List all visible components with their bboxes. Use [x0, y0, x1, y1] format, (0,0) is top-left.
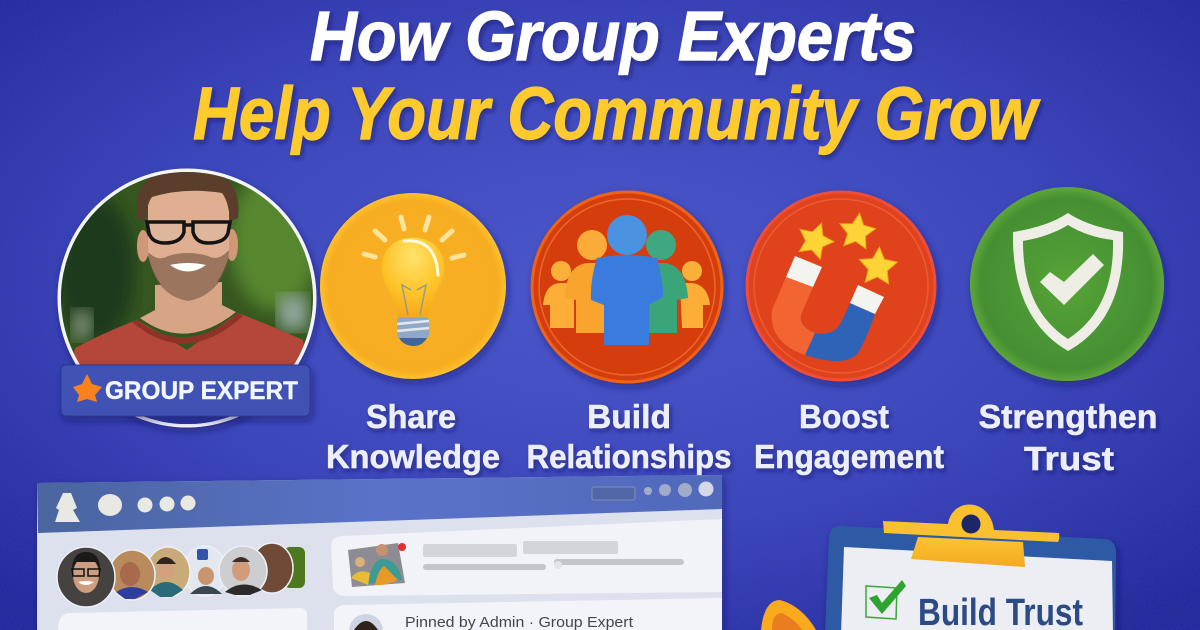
clipboard: build trust [825, 504, 1116, 630]
avatar 6 [251, 543, 293, 593]
glasses [147, 222, 230, 243]
label: boost engagement: Boost [799, 398, 889, 435]
photo [61, 172, 313, 424]
label: share knowledge [326, 398, 500, 475]
ears [137, 230, 149, 262]
header bar [37, 475, 722, 533]
portrait: group expert [50, 165, 320, 440]
post thumbnail [348, 543, 406, 587]
label: share knowledge: Share [366, 398, 456, 435]
avatar 2 [109, 550, 155, 600]
label: build relationships [526, 398, 732, 475]
icon: people badge [532, 192, 722, 382]
sidebar card [58, 608, 307, 630]
middle people [577, 230, 607, 260]
avatar 1 [57, 547, 115, 607]
screw base [397, 317, 429, 338]
label: build relationships: Relationships [526, 438, 732, 475]
magnet arms [772, 277, 815, 355]
title [193, 0, 1041, 155]
label: share knowledge: Knowledge [326, 438, 500, 475]
paper [841, 547, 1113, 630]
rays [364, 217, 464, 258]
feature labels [326, 398, 1158, 477]
member avatars [57, 543, 305, 607]
outer people [551, 261, 571, 281]
icon: shield badge [970, 187, 1164, 381]
title line 2: Help Your Community Grow [193, 72, 1041, 155]
badge: group expert [61, 365, 310, 416]
post card [331, 519, 722, 596]
bulb [381, 237, 445, 317]
avatar 3 [146, 547, 190, 597]
icon: green check [866, 580, 906, 619]
label: strengthen trust [978, 398, 1158, 477]
label: strengthen trust: Strengthen [978, 398, 1158, 435]
clip [883, 504, 1059, 567]
front person [607, 215, 647, 255]
icon: megaphone [761, 600, 816, 630]
icon: stars [793, 211, 898, 284]
group page mockup [37, 475, 722, 630]
label: boost engagement [754, 398, 944, 475]
face [148, 190, 229, 285]
label: boost engagement: Engagement [754, 438, 944, 475]
label: build relationships: Build [587, 398, 671, 435]
badge: group expert: GROUP EXPERT [105, 377, 298, 405]
pinned post card [334, 598, 722, 630]
icon: star [73, 374, 102, 402]
hair [137, 169, 239, 222]
label: strengthen trust: Trust [1024, 440, 1114, 477]
avatar 5 [219, 546, 267, 596]
icon: light bulb badge [320, 193, 506, 379]
avatar 4 [184, 546, 226, 596]
shirt [74, 313, 304, 424]
header icons [55, 482, 714, 522]
smile [170, 263, 206, 272]
neck [140, 282, 236, 334]
icon: magnet badge [747, 192, 935, 380]
stubble [148, 250, 229, 301]
